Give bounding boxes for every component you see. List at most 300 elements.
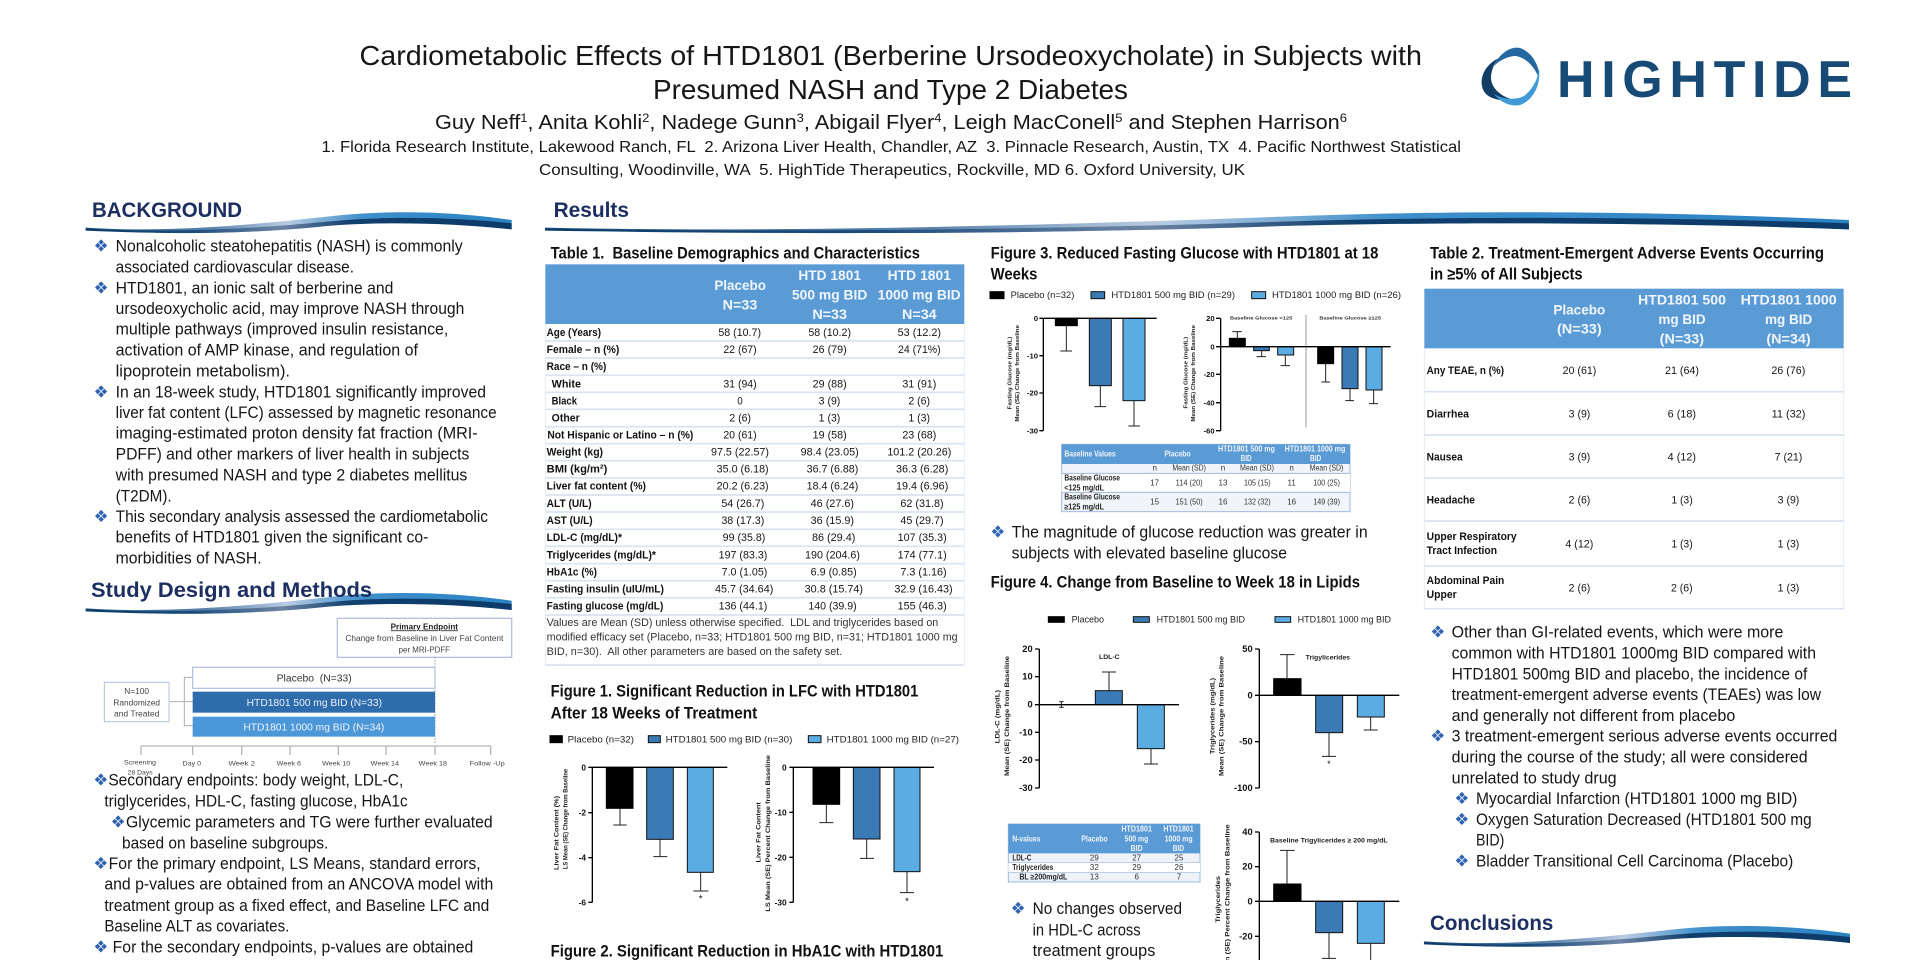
table: baseline glucose values: 16 — [1219, 497, 1228, 506]
table 1 body rows: Race – n (%) — [547, 361, 607, 373]
table: lipid N values: 500 mg — [1125, 834, 1148, 843]
figure 1 legend: Placebo (n=32) — [568, 734, 634, 744]
chart: LDL-C: 20 — [1022, 644, 1033, 654]
study schema diagram — [104, 618, 512, 776]
text block: background bullets: ❖ — [94, 507, 109, 526]
table: lipid N values: 25 — [1175, 853, 1184, 862]
table 1 header row: HTD 1801 — [798, 267, 861, 283]
title: Cardiometabolic Effects of HTD1801 (Berberine Ursodeoxycholate) in Subjects with — [360, 40, 1422, 71]
text block: methods bullets: For the primary endpoint, LS Means, standard errors, — [109, 854, 481, 873]
table 2 body rows: 3 (9) — [1569, 451, 1590, 463]
table 1 body rows: Fasting glucose (mg/dL) — [547, 601, 664, 613]
table: baseline glucose values: Mean (SD) — [1310, 464, 1344, 473]
text block: methods bullets: Secondary endpoints: body weight, LDL-C, — [108, 771, 403, 790]
heading: figure 3 — [991, 244, 1378, 283]
table 1 body rows: 53 (12.2) — [898, 327, 941, 339]
chart: triglycerides: -100 — [1234, 783, 1253, 793]
chart: fasting glucose change: -30 — [1027, 426, 1038, 435]
chart: LFC absolute change: 0 — [581, 762, 586, 772]
text block: background bullets: benefits of HTD1801 given the significant co- — [116, 528, 428, 547]
chart: fasting glucose change: Mean (SE) Change from Baseline — [1015, 325, 1021, 422]
table 1 body rows: 6.9 (0.85) — [811, 566, 857, 578]
chart: fasting glucose by baseline subgroup: Fasting Glucose (mg/dL) — [1183, 337, 1189, 408]
table: baseline glucose values: 151 (50) — [1176, 497, 1203, 506]
text block: background bullets: This secondary analysis assessed the cardiometabolic — [116, 507, 488, 526]
text block: methods bullets: Glycemic parameters and TG were further evaluated — [126, 813, 493, 832]
table 1 body rows: 62 (31.8) — [900, 498, 944, 510]
table 1 body rows: 23 (68) — [902, 429, 936, 441]
table: lipid N values: BL ≥200mg/dL — [1019, 873, 1067, 882]
text block: safety findings: ❖ — [1454, 810, 1469, 829]
table 2 body rows: 2 (6) — [1671, 582, 1693, 594]
table 1 body rows: 32.9 (16.43) — [894, 583, 953, 595]
table 1 body rows: 30.8 (15.74) — [805, 583, 863, 595]
study schema diagram: Week 2 — [228, 761, 255, 768]
text block: glucose finding: ❖ — [990, 522, 1005, 541]
table: baseline glucose values — [1062, 444, 1350, 512]
text block: background bullets: (T2DM). — [116, 486, 172, 505]
chart: LFC absolute change: LS Mean (SE) Change from Baseline — [563, 769, 570, 869]
table 1 footnote: modified efficacy set (Placebo, n=33; HTD1801 500 mg BID, n=31; HTD1801 1000 mg — [547, 631, 958, 643]
chart: fasting glucose change — [1007, 314, 1157, 435]
heading: conclusions: Conclusions — [1430, 912, 1553, 935]
table 2 body rows: Abdominal Pain — [1427, 575, 1505, 587]
study schema diagram: 28 Days — [128, 769, 153, 776]
study schema diagram: N=100 — [124, 686, 149, 696]
text block: safety findings: BID) — [1476, 831, 1504, 850]
text block: methods bullets — [93, 771, 493, 956]
text block: safety findings: ❖ — [1430, 623, 1445, 642]
table 1 header row: N=33 — [723, 296, 758, 312]
study schema diagram: HTD1801 500 mg BID (N=33) — [247, 698, 382, 709]
chart: triglycerides percent change, baseline at least 200 — [1215, 824, 1399, 960]
study schema diagram: and Treated — [114, 709, 160, 719]
study schema diagram: Follow -Up — [470, 761, 505, 768]
study schema diagram: per MRI-PDFF — [399, 644, 450, 654]
text block: safety findings: treatment-emergent adverse events (TEAEs) was low — [1452, 685, 1822, 704]
table 1 body rows: Fasting insulin (uIU/mL) — [547, 583, 664, 595]
table 1 body rows: 36.7 (6.88) — [807, 464, 858, 476]
chart: fasting glucose by baseline subgroup: Baseline Glucose ≥125 — [1319, 315, 1381, 320]
table 1 body rows — [545, 324, 964, 665]
figure 4 legend: HTD1801 500 mg BID — [1157, 615, 1246, 625]
text block: glucose finding: The magnitude of glucose reduction was greater in — [1012, 522, 1368, 541]
table 1 body rows: Not Hispanic or Latino – n (%) — [547, 429, 694, 441]
text block: safety findings: 3 treatment-emergent serious adverse events occurred — [1452, 727, 1837, 746]
table 1 body rows: 45.7 (34.64) — [715, 583, 773, 595]
text block: methods bullets: Baseline ALT as covariates. — [104, 917, 289, 936]
table 1 body rows: 86 (29.4) — [812, 532, 855, 544]
text block: safety findings: HTD1801 500mg BID and placebo, the incidence of — [1452, 664, 1808, 683]
table 1 body rows: 26 (79) — [813, 344, 847, 356]
study schema diagram: Placebo (N=33) — [277, 674, 352, 685]
study schema diagram: Week 18 — [419, 761, 447, 768]
table: lipid N values: 29 — [1132, 863, 1142, 872]
table 1 body rows: Age (Years) — [547, 327, 601, 339]
figure 1 legend: HTD1801 1000 mg BID (n=27) — [827, 734, 959, 744]
chart: fasting glucose by baseline subgroup: -60 — [1204, 426, 1215, 435]
table 2 body rows: 6 (18) — [1668, 408, 1696, 420]
table 1 body rows: 174 (77.1) — [898, 549, 947, 561]
table 1 body rows: 2 (6) — [908, 395, 930, 407]
table: baseline glucose values: Baseline Glucose — [1064, 474, 1120, 483]
table 2 header row: (N=33) — [1557, 321, 1602, 337]
table 1 body rows: Triglycerides (mg/dL)* — [547, 549, 657, 561]
chart: LDL-C: LDL-C (mg/dL) — [995, 690, 1002, 743]
table 1 body rows: HbA1c (%) — [547, 566, 597, 578]
text block: glucose finding — [990, 522, 1368, 562]
table 1 footnote — [547, 617, 958, 658]
table 2 body rows: 4 (12) — [1668, 451, 1696, 463]
text block: background bullets: associated cardiovascular disease. — [116, 258, 354, 277]
table 1 body rows: 46 (27.6) — [811, 498, 854, 510]
table: lipid N values: LDL-C — [1012, 853, 1032, 862]
text block: safety findings: Bladder Transitional Cell Carcinoma (Placebo) — [1476, 852, 1793, 871]
study schema diagram: Screening — [124, 759, 156, 766]
panel: figure 3 — [990, 244, 1401, 591]
chart: fasting glucose by baseline subgroup: Baseline Glucose <125 — [1230, 315, 1293, 320]
chart: fasting glucose change: -10 — [1027, 351, 1038, 360]
table: baseline glucose values: Baseline Glucose — [1064, 493, 1120, 502]
table 2 body rows: Tract Infection — [1427, 545, 1497, 557]
text block: safety findings: ❖ — [1454, 789, 1469, 808]
chart: fasting glucose by baseline subgroup — [1183, 314, 1391, 435]
text block: HDL-C finding: treatment groups — [1033, 941, 1155, 960]
table 1 body rows: LDL-C (mg/dL)* — [547, 532, 623, 544]
table 2 body rows: Any TEAE, n (%) — [1427, 365, 1504, 377]
text block: background bullets: lipoprotein metabolism). — [116, 362, 290, 381]
chart: LFC absolute change: -2 — [579, 808, 586, 818]
chart: triglycerides: -50 — [1239, 737, 1253, 747]
table 1 body rows: Weight (kg) — [547, 447, 603, 459]
table 1 body rows: 20.2 (6.23) — [717, 481, 769, 493]
table 1 body rows: 197 (83.3) — [719, 549, 767, 561]
text block: methods bullets: ❖ — [93, 854, 108, 873]
table: baseline glucose values: 132 (32) — [1244, 497, 1271, 506]
table 2 body rows: Nausea — [1427, 451, 1463, 463]
chart: LDL-C: -30 — [1019, 783, 1033, 793]
table 1 body rows: AST (U/L) — [547, 515, 593, 527]
study schema diagram: Day 0 — [183, 761, 201, 768]
table: baseline glucose values: n — [1221, 464, 1225, 473]
table: baseline glucose values: 13 — [1219, 478, 1228, 487]
chart: LFC percent change: 0 — [782, 762, 787, 772]
chart: triglycerides — [1209, 644, 1399, 793]
table: baseline glucose values: Mean (SD) — [1240, 464, 1274, 473]
heading: figure 1: Figure 1. Significant Reduction in LFC with HTD1801 — [551, 683, 918, 701]
text block: background bullets: In an 18-week study, HTD1801 significantly improved — [116, 382, 486, 401]
panel: conclusions heading — [1424, 912, 1850, 947]
table: baseline glucose values: n — [1152, 464, 1157, 473]
heading: table 2: Table 2. Treatment-Emergent Adverse Events Occurring — [1430, 244, 1824, 262]
chart: LDL-C: 0 — [1027, 700, 1033, 710]
table 1 body rows: 36 (15.9) — [811, 515, 854, 527]
table 1 body rows: Female – n (%) — [547, 344, 620, 356]
table 1 body rows: 190 (204.6) — [805, 549, 860, 561]
table 2 body rows: Upper Respiratory — [1427, 531, 1517, 543]
table 1 body rows: 155 (46.3) — [898, 601, 947, 613]
chart: LFC absolute change: -6 — [579, 897, 586, 907]
table 2 body rows: 2 (6) — [1569, 494, 1590, 506]
table: baseline glucose values: 15 — [1150, 497, 1160, 506]
chart: triglycerides percent change, baseline at least 200: Triglycerides — [1215, 876, 1222, 923]
authors: Guy Neff 1, Anita Kohli 2, Nadege Gunn 3, Abigail Flyer 4, Leigh MacConell 5 and Stephen Harrison 6 — [435, 111, 1347, 134]
table: baseline glucose values: 149 (39) — [1313, 497, 1340, 506]
table 1 body rows: 7.0 (1.05) — [722, 566, 767, 578]
table 1 body rows: 3 (9) — [819, 395, 840, 407]
text block: safety findings: unrelated to study drug — [1452, 768, 1617, 787]
text block: HDL-C finding: ❖ — [1011, 899, 1026, 918]
title — [360, 40, 1422, 105]
table: lipid N values: 29 — [1090, 853, 1099, 862]
table: lipid N values: 27 — [1132, 853, 1142, 862]
table 2 body rows: 2 (6) — [1569, 582, 1590, 594]
table: lipid N values: 7 — [1177, 873, 1182, 882]
table: baseline glucose values: ≥125 mg/dL — [1064, 502, 1104, 511]
table: lipid N values: HTD1801 — [1121, 824, 1152, 833]
heading: figure 1: After 18 Weeks of Treatment — [551, 704, 758, 722]
text block: safety findings: Oxygen Saturation Decreased (HTD1801 500 mg — [1476, 810, 1812, 829]
table 2 body rows: 7 (21) — [1775, 451, 1802, 463]
table 2 header row — [1424, 289, 1844, 348]
chart: fasting glucose change: -20 — [1027, 389, 1038, 398]
figure 1 legend: HTD1801 500 mg BID (n=30) — [666, 734, 792, 744]
table 1 body rows: 19.4 (6.96) — [896, 481, 948, 493]
chart: triglycerides percent change, baseline at least 200: 0 — [1247, 896, 1253, 906]
table: lipid N values: 32 — [1090, 863, 1099, 872]
table 1 body rows: 1 (3) — [819, 412, 840, 424]
chart: LFC absolute change: Liver Fat Content (%) — [553, 796, 560, 870]
table 1 footnote: BID, n=30). All other parameters are based on the safety set. — [547, 646, 842, 658]
table 1 body rows: 0 — [737, 395, 743, 407]
table 1 body rows: 45 (29.7) — [900, 515, 944, 527]
table 2 body rows: 1 (3) — [1778, 582, 1799, 594]
chart: fasting glucose by baseline subgroup: 20 — [1206, 314, 1215, 323]
text block: background bullets: with presumed NASH and type 2 diabetes mellitus — [115, 465, 467, 484]
chart: LDL-C: LDL-C — [1099, 654, 1120, 661]
text block: background bullets: morbidities of NASH. — [116, 548, 262, 567]
chart: LFC absolute change — [553, 762, 727, 907]
chart: fasting glucose by baseline subgroup: -20 — [1204, 370, 1215, 379]
table 2 body rows: 1 (3) — [1671, 494, 1693, 506]
chart: triglycerides percent change, baseline at least 200: 40 — [1242, 827, 1253, 837]
chart: LFC percent change: LS Mean (SE) Percent Change from Baseline — [765, 755, 772, 912]
panel: study design and methods — [86, 579, 512, 956]
text block: background bullets: PDFF) and other markers of liver health in subjects — [116, 445, 469, 464]
text block: methods bullets: and p-values are obtained from an ANCOVA model with — [104, 875, 493, 894]
affiliations: Consulting, Woodinville, WA 5. HighTide Therapeutics, Rockville, MD 6. Oxford University, UK — [539, 162, 1245, 179]
heading: table 1: Table 1. Baseline Demographics and Characteristics — [551, 244, 920, 262]
chart: LDL-C — [995, 644, 1179, 793]
heading: figure 3: Figure 3. Reduced Fasting Glucose with HTD1801 at 18 — [991, 244, 1378, 262]
text block: background bullets: ❖ — [94, 278, 109, 297]
table 1 body rows: 35.0 (6.18) — [717, 464, 769, 476]
heading: background: BACKGROUND — [92, 199, 242, 222]
table: lipid N values: 6 — [1134, 873, 1139, 882]
table 2 body rows: 1 (3) — [1778, 538, 1799, 550]
poster header — [322, 40, 1852, 179]
table 1 body rows: 38 (17.3) — [721, 515, 764, 527]
figure 1 legend — [550, 734, 959, 744]
chart: LFC percent change: -10 — [775, 807, 787, 817]
table: baseline glucose values: 114 (20) — [1176, 478, 1203, 487]
table 1 body rows: 54 (26.7) — [721, 498, 764, 510]
figure 3 legend: HTD1801 500 mg BID (n=29) — [1111, 290, 1235, 300]
panel: figure 4 lipids — [995, 615, 1399, 960]
panel: table 2 adverse events — [1424, 244, 1844, 609]
table 1 body rows: 136 (44.1) — [719, 601, 767, 613]
text block: background bullets: ❖ — [94, 382, 109, 401]
study schema diagram: Primary Endpoint — [391, 622, 458, 631]
chart: LFC percent change: -20 — [775, 852, 787, 862]
chart: triglycerides: 50 — [1242, 644, 1253, 654]
chart: fasting glucose change: Fasting Glucose (mg/dL) — [1007, 337, 1013, 409]
table: baseline glucose values: Placebo — [1164, 450, 1191, 459]
table 2 body rows: 26 (76) — [1771, 365, 1805, 377]
table 2 body rows: Diarrhea — [1427, 408, 1470, 420]
text block: safety findings: ❖ — [1454, 852, 1469, 871]
table: lipid N values: Placebo — [1081, 834, 1108, 843]
figure 4 legend: Placebo — [1072, 615, 1104, 625]
text block: methods bullets: treatment group as a fixed effect, and Baseline LFC and — [104, 896, 489, 915]
heading: figure 1 — [551, 683, 918, 722]
chart: LFC percent change: Liver Fat Content — [756, 801, 763, 862]
study schema diagram: HTD1801 1000 mg BID (N=34) — [243, 723, 384, 734]
table 2 header row: (N=34) — [1766, 330, 1811, 346]
text block: background bullets: ursodeoxycholic acid, may improve NASH through — [116, 299, 464, 318]
table 1 header row: HTD 1801 — [888, 267, 951, 283]
study schema diagram: Week 10 — [322, 761, 351, 768]
text block: glucose finding: subjects with elevated baseline glucose — [1012, 543, 1287, 562]
table: lipid N values: HTD1801 — [1163, 824, 1194, 833]
table 1 header row: Placebo — [714, 277, 766, 293]
figure 3 legend: HTD1801 1000 mg BID (n=26) — [1272, 290, 1401, 300]
table 1 body rows: Other — [552, 412, 580, 424]
table 2 header row: Placebo — [1553, 301, 1605, 317]
table 2 header row: HTD1801 1000 — [1741, 291, 1837, 307]
text block: background bullets: ❖ — [94, 237, 109, 256]
table 1 body rows: 7.3 (1.16) — [900, 566, 947, 578]
table 1 body rows: 97.5 (22.57) — [711, 447, 769, 459]
table: lipid N values: BID — [1131, 844, 1143, 853]
text block: methods bullets: triglycerides, HDL-C, fasting glucose, HbA1c — [104, 792, 408, 811]
figure 4 legend: HTD1801 1000 mg BID — [1298, 615, 1392, 625]
table 2 body rows: 11 (32) — [1772, 408, 1805, 420]
heading: figure 3: Weeks — [991, 265, 1037, 283]
chart: triglycerides: Mean (SE) Change from Baseline — [1218, 656, 1225, 776]
table 1 header row: N=33 — [812, 306, 847, 322]
chart: fasting glucose by baseline subgroup: 0 — [1210, 342, 1215, 351]
panel: table 1 baseline demographics — [545, 244, 964, 665]
chart: triglycerides: Trigylicerides — [1306, 654, 1350, 661]
table: baseline glucose values: HTD1801 1000 mg — [1285, 444, 1345, 453]
chart: LFC absolute change: * — [699, 894, 703, 905]
table 2 body rows: Upper — [1427, 589, 1457, 601]
text block: background bullets: Nonalcoholic steatohepatitis (NASH) is commonly — [116, 237, 463, 256]
text block: background bullets: liver fat content (LFC) assessed by magnetic resonance — [116, 403, 497, 422]
study schema diagram: Randomized — [113, 698, 160, 708]
title: Presumed NASH and Type 2 Diabetes — [653, 74, 1128, 105]
table: baseline glucose values: Baseline Values — [1064, 450, 1116, 459]
chart: triglycerides: Triglycerides (mg/dL) — [1209, 678, 1216, 754]
table 1 header row: 1000 mg BID — [878, 287, 961, 303]
table 1 body rows: 1 (3) — [908, 412, 930, 424]
chart: triglycerides: 0 — [1247, 690, 1253, 700]
text block: safety findings: ❖ — [1430, 727, 1445, 746]
text block: background bullets: imaging-estimated proton density fat fraction (MRI- — [116, 424, 478, 443]
table: lipid N values: N-values — [1012, 834, 1041, 843]
table 1 body rows: 24 (71%) — [898, 344, 941, 356]
table 1 footnote: Values are Mean (SD) unless otherwise specified. LDL and triglycerides based on — [547, 617, 938, 629]
text block: safety findings: Other than GI-related events, which were more — [1452, 623, 1783, 642]
table: lipid N values: BID — [1173, 844, 1184, 853]
table: baseline glucose values: Mean (SD) — [1172, 464, 1206, 473]
text block: methods bullets: ❖ — [93, 937, 108, 956]
affiliations: 1. Florida Research Institute, Lakewood Ranch, FL 2. Arizona Liver Health, Chandler, AZ 3. Pinnacle Research, Austin, TX 4. Pacific Northwest Statistical — [322, 139, 1461, 156]
table: baseline glucose values: 11 — [1288, 478, 1296, 487]
text block: methods bullets: based on baseline subgroups. — [122, 833, 328, 852]
panel: figure 1 and figure 2 — [550, 683, 959, 960]
affiliations — [322, 139, 1461, 179]
text block: safety findings: Myocardial Infarction (HTD1801 1000 mg BID) — [1476, 789, 1797, 808]
study schema diagram: Change from Baseline in Liver Fat Content — [345, 633, 504, 643]
table: baseline glucose values: 17 — [1150, 478, 1160, 487]
text block: safety findings — [1430, 623, 1837, 871]
table 1 body rows: 58 (10.7) — [718, 327, 761, 339]
study schema diagram: Week 6 — [277, 761, 301, 768]
table: lipid N values: 1000 mg — [1165, 834, 1193, 843]
figure 3 legend — [990, 290, 1401, 300]
table 1 body rows: 29 (88) — [813, 378, 847, 390]
chart: LFC percent change: -30 — [775, 897, 787, 907]
table 1 body rows: 22 (67) — [723, 344, 757, 356]
heading: table 2: in ≥5% of All Subjects — [1430, 265, 1583, 283]
chart: LDL-C: -10 — [1019, 727, 1033, 737]
table 2 body rows: Headache — [1427, 494, 1475, 506]
chart: triglycerides: * — [1327, 759, 1331, 769]
table 2 header row: mg BID — [1658, 311, 1706, 327]
table: lipid N values: Triglycerides — [1012, 863, 1054, 872]
text block: background bullets: activation of AMP kinase, and regulation of — [116, 341, 418, 360]
chart: fasting glucose by baseline subgroup: -40 — [1204, 398, 1215, 407]
chart: LFC percent change: * — [905, 896, 909, 907]
chart: triglycerides percent change, baseline at least 200: Baseline Trigylicerides ≥ 200 mg/dL — [1270, 838, 1388, 845]
table: lipid N values: 26 — [1175, 863, 1184, 872]
table 1 body rows: 36.3 (6.28) — [896, 464, 948, 476]
table 1 header row: 500 mg BID — [792, 287, 867, 303]
table 2 body rows: 3 (9) — [1569, 408, 1590, 420]
text block: background bullets: HTD1801, an ionic salt of berberine and — [116, 278, 393, 297]
heading: table 2 — [1430, 244, 1824, 283]
table 1 header row — [545, 264, 964, 324]
table 2 header row: (N=33) — [1660, 330, 1704, 346]
table 1 body rows: 99 (35.8) — [723, 532, 765, 544]
table 1 body rows: 107 (35.3) — [898, 532, 947, 544]
table 1 body rows: 58 (10.2) — [808, 327, 851, 339]
figure 3 legend: Placebo (n=32) — [1011, 290, 1074, 300]
table: baseline glucose values: 105 (15) — [1244, 478, 1271, 487]
table: baseline glucose values: n — [1289, 464, 1294, 473]
study schema diagram: Week 14 — [371, 761, 399, 768]
table: baseline glucose values: 100 (25) — [1313, 478, 1340, 487]
table 1 body rows: ALT (U/L) — [547, 498, 592, 510]
table 2 body rows: 20 (61) — [1563, 365, 1596, 377]
table 2 body rows: 3 (9) — [1778, 494, 1799, 506]
chart: LFC absolute change: -4 — [579, 853, 586, 863]
table 1 body rows: BMI (kg/m²) — [547, 464, 608, 476]
table: lipid N values: 13 — [1090, 873, 1099, 882]
text block: safety findings: and generally not different from placebo — [1452, 706, 1735, 725]
